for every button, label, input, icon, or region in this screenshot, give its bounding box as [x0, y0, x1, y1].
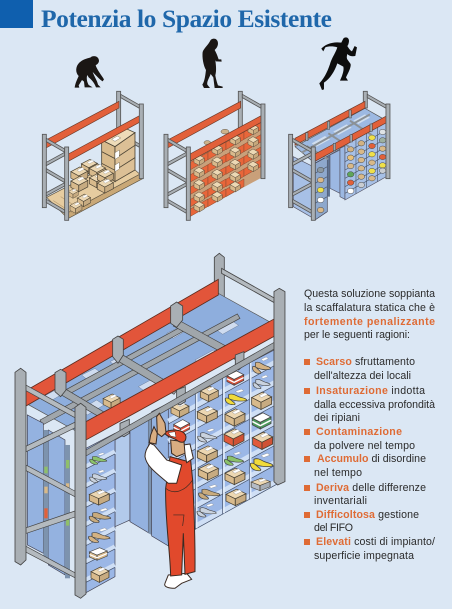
face	[171, 440, 185, 457]
text block: intro: fortemente penalizzante	[304, 316, 435, 328]
bulleted list: dei ripiani	[314, 412, 360, 424]
title accent square	[0, 0, 33, 28]
top deck	[295, 108, 388, 163]
rack 2: red shelves full of small boxes	[164, 91, 265, 220]
blue panels	[293, 157, 313, 218]
deck rails	[302, 114, 372, 159]
top box lumps	[221, 129, 229, 134]
left front cell column	[86, 433, 115, 593]
red beams	[46, 101, 119, 148]
bulleted list: Insaturazione indotta	[316, 385, 425, 397]
red beams	[26, 279, 278, 440]
left post	[15, 368, 26, 565]
rack 3: dynamic storage units	[289, 91, 390, 220]
bulleted list: nel tempo	[314, 467, 362, 479]
bulleted list: Scarso sfruttamento	[316, 356, 415, 368]
bulleted list: Difficoltosa gestione	[316, 509, 419, 521]
title block	[0, 0, 332, 33]
worker	[145, 413, 195, 588]
right dividers	[197, 357, 251, 528]
central blue panels	[115, 432, 130, 527]
bays	[190, 122, 262, 217]
front lower rail	[86, 340, 278, 456]
rear uprights and brace	[214, 253, 277, 320]
deck rails	[40, 314, 240, 425]
left unit blue panels	[27, 415, 43, 553]
large rack illustration	[15, 253, 285, 598]
overall pocket	[166, 480, 193, 526]
back uprights	[238, 91, 262, 131]
medium boxes	[68, 159, 113, 213]
bulleted list	[304, 356, 435, 562]
front frames	[289, 104, 390, 220]
right shelf edges	[168, 364, 277, 529]
left unit item strips	[43, 430, 70, 578]
bulleted list: Accumulo di disordine	[317, 453, 426, 465]
deck slats	[312, 114, 370, 147]
shelf fill	[190, 115, 263, 217]
beam connectors	[55, 302, 244, 437]
shoes	[165, 573, 192, 588]
bulleted list: superficie impegnata	[314, 550, 414, 562]
right hand	[157, 413, 166, 437]
beam connectors	[306, 110, 372, 151]
rear red beam segments	[295, 101, 365, 145]
bulleted list: del FIFO	[314, 522, 353, 534]
right end upright	[274, 288, 285, 485]
front frames	[42, 104, 143, 220]
cap panel	[168, 432, 176, 437]
big box stack	[102, 127, 135, 182]
text block: intro: Questa soluzione soppianta	[304, 288, 435, 300]
left hand	[149, 427, 157, 444]
deck slats	[43, 322, 239, 415]
front red beam	[190, 115, 263, 161]
icon: hominid silhouette	[202, 39, 223, 88]
pallet	[47, 158, 143, 217]
bulleted list: Elevati costi di impianto/	[316, 536, 435, 548]
bulleted list: dalla eccessiva profondità	[314, 399, 435, 411]
collar	[183, 444, 193, 463]
bulleted list: dell'altezza dei locali	[314, 370, 411, 382]
bulleted list: inventariali	[314, 495, 367, 507]
right storage cells	[168, 348, 277, 529]
front red beam segments	[315, 115, 388, 161]
right unit contents	[103, 357, 273, 517]
rack 1: pallets and boxes	[42, 91, 143, 220]
left end frame braces	[22, 383, 76, 578]
overalls	[166, 453, 195, 576]
bulleted list: Contaminazione	[316, 426, 402, 438]
bulleted list: da polvere nel tempo	[314, 440, 415, 452]
text block: intro: la scaffalatura statica che è	[304, 302, 435, 314]
front frames	[164, 104, 265, 220]
text block: intro: per le seguenti ragioni:	[304, 329, 410, 341]
rear red beam	[168, 101, 241, 148]
bulleted list: Deriva delle differenze	[316, 482, 426, 494]
front post	[75, 403, 86, 598]
upper deck	[26, 293, 278, 437]
stored items	[317, 129, 386, 213]
back uprights	[363, 91, 387, 109]
text block: intro	[304, 288, 435, 341]
title: Potenzia lo Spazio Esistente	[41, 4, 332, 33]
back uprights	[117, 91, 140, 178]
shelf grid	[315, 127, 388, 203]
sleeve	[145, 443, 182, 483]
left column shelves	[86, 452, 115, 580]
icon: runner silhouette	[319, 37, 357, 90]
icon: ape silhouette	[75, 56, 104, 88]
left column contents	[89, 453, 111, 582]
cap	[164, 430, 186, 442]
right shelf tops	[168, 361, 277, 527]
bullets	[304, 359, 310, 545]
